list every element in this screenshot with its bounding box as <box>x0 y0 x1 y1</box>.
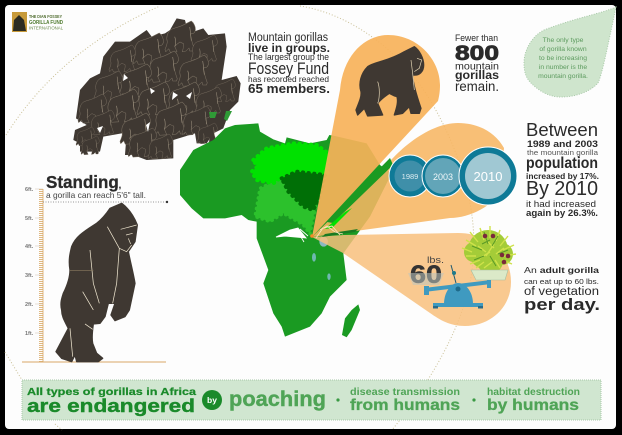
logo: Dian Fossey Gorilla Fund: GORILLA FUND <box>29 20 63 26</box>
text block: live in groups: The largest group the <box>248 52 329 62</box>
text block: adult gorilla diet: An adult gorilla <box>524 265 599 275</box>
left pan <box>408 273 444 285</box>
orange cone: population growth <box>312 123 504 237</box>
balance scale <box>424 265 491 308</box>
badge: by: by <box>207 395 217 405</box>
text block: population increase: the mountain gorilla <box>527 148 599 157</box>
heading: standing: Standing, <box>46 172 121 192</box>
timeline circles <box>389 147 517 205</box>
text block: live in groups: live in groups. <box>248 41 330 55</box>
text block: population increase: increased by 17%. <box>526 171 599 181</box>
height ruler: 6ft. <box>25 187 34 193</box>
text block: fewer than 800: 800 <box>455 42 499 65</box>
orange cone: diet <box>312 233 511 326</box>
text block: live in groups <box>248 32 330 96</box>
threat: poaching: poaching <box>229 388 326 411</box>
medium green range <box>255 173 327 234</box>
heading: standing <box>43 172 168 203</box>
small green flecks at the gorilla group <box>209 111 232 121</box>
threat: habitat destruction <box>487 387 580 414</box>
label: 60 lbs: 60 <box>410 261 442 289</box>
threat: disease transmission: disease transmission <box>350 387 460 398</box>
height ruler: 4ft. <box>25 244 34 250</box>
label: 60 lbs: lbs. <box>427 255 444 265</box>
text block: adult gorilla diet: can eat up to 60 lbs. <box>524 277 599 286</box>
standing gorilla silhouette <box>56 203 137 362</box>
height ruler <box>22 187 166 362</box>
banner: threats <box>22 380 601 420</box>
badge: by <box>202 390 222 410</box>
logo: Dian Fossey Gorilla Fund <box>12 12 63 32</box>
circle: 2003: 2003 <box>433 172 453 182</box>
text block: population increase <box>526 120 599 219</box>
text block: population increase: population <box>526 155 598 172</box>
circle: 2010: 2010 <box>474 169 502 184</box>
logo: Dian Fossey Gorilla Fund: INTERNATIONAL <box>29 26 63 30</box>
leaf callout: mountain gorilla. <box>538 73 588 80</box>
gorilla group illustration <box>73 18 241 160</box>
text block: population increase: 1989 and 2003 <box>527 139 598 150</box>
text block: population increase: again by 26.3%. <box>526 208 598 219</box>
vegetation bowl <box>462 226 516 280</box>
text block: live in groups: 65 members. <box>248 81 330 96</box>
text block: live in groups: has recorded reached <box>248 74 329 84</box>
height ruler: 1ft. <box>25 331 34 337</box>
scale and vegetation illustration <box>408 226 516 308</box>
text block: fewer than 800 <box>455 33 499 94</box>
headline: endangered: are endangered <box>27 395 195 416</box>
dotted circle outline <box>5 6 474 430</box>
height ruler: 3ft. <box>25 273 34 279</box>
orange cone: population remaining <box>312 35 440 237</box>
text block: live in groups: Fossey Fund <box>248 59 329 78</box>
text block: fewer than 800: Fewer than <box>455 33 498 43</box>
leaf callout: to be increasing <box>539 55 587 62</box>
logo: Dian Fossey Gorilla Fund: THE DIAN FOSSEY <box>29 14 62 19</box>
text block: adult gorilla diet: per day. <box>524 295 600 314</box>
map of Africa <box>180 123 392 337</box>
threat: disease transmission: from humans <box>350 397 460 414</box>
leaf callout: in number is the <box>539 64 587 71</box>
text block: adult gorilla diet: of vegetation <box>524 286 599 298</box>
text block: fewer than 800: mountain <box>455 60 499 72</box>
heading: standing: a gorilla can reach 5'6" tall. <box>46 190 146 200</box>
leaf callout: The only type <box>543 37 584 44</box>
label: 60 lbs <box>410 255 444 289</box>
mountain lines <box>276 226 343 242</box>
bright green range <box>252 143 328 183</box>
height ruler: 5ft. <box>25 216 34 222</box>
mainland silhouette <box>180 123 392 337</box>
green stripe toward the circles <box>322 158 393 237</box>
threat: disease transmission <box>350 387 460 414</box>
threat: habitat destruction: habitat destruction <box>487 387 580 398</box>
text block: population increase: By 2010 <box>526 178 598 200</box>
headline: endangered <box>27 386 196 416</box>
text block: population increase: it had increased <box>526 199 596 210</box>
circle: 1989: 1989 <box>402 172 418 181</box>
gorilla icon: walking silhouette <box>356 47 424 116</box>
Madagascar <box>342 304 360 337</box>
leaf callout: of gorilla known <box>539 46 587 53</box>
text block: live in groups: Mountain gorillas <box>248 32 328 44</box>
text block: population increase: Between <box>526 120 598 140</box>
height ruler: 2ft. <box>25 302 34 308</box>
text block: fewer than 800: remain. <box>455 79 499 94</box>
lakes <box>312 237 331 280</box>
text block: fewer than 800: gorillas <box>455 70 499 82</box>
headline: endangered: All types of gorillas in Africa <box>27 386 196 398</box>
text block: adult gorilla diet <box>524 265 600 314</box>
leaf callout <box>524 7 616 97</box>
dark green range <box>282 172 325 210</box>
threat: habitat destruction: by humans <box>487 397 579 414</box>
